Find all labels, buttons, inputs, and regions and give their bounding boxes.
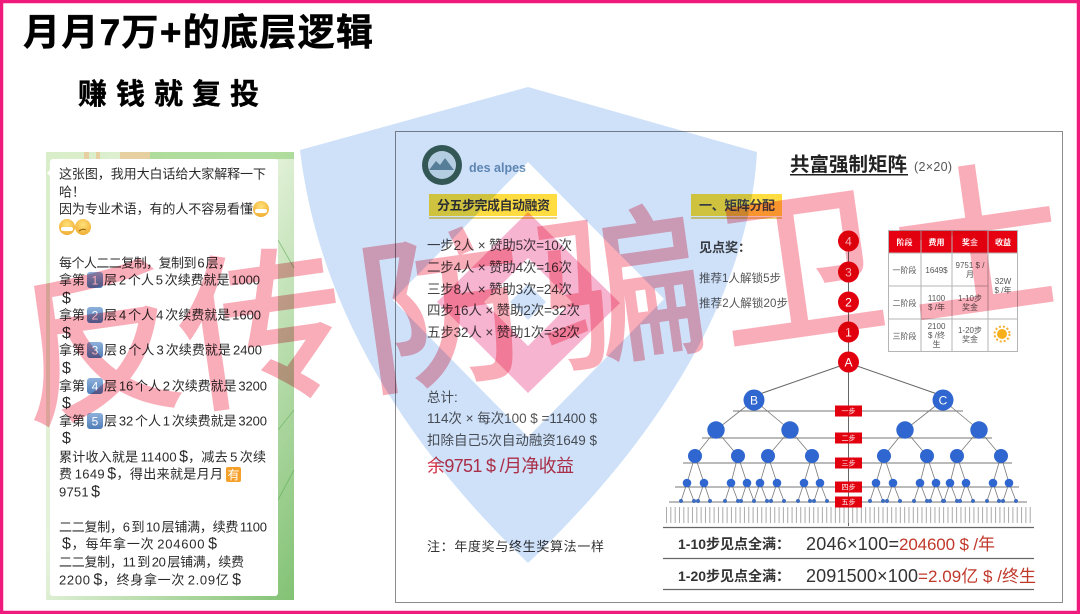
anti-fraud watermark text: 卫 (704, 165, 897, 375)
level 4 nodes (683, 479, 1013, 487)
table: stages: 月 (966, 270, 974, 279)
table: stages: 奖金 (962, 237, 978, 247)
chat text: $ (62, 325, 71, 342)
logo (422, 145, 526, 185)
text: 1-20 step total: =2.09亿 $ /终生 (918, 567, 1036, 586)
node B: B (750, 394, 758, 408)
table: stages: 1100 (928, 294, 946, 303)
text: steps list (427, 238, 580, 340)
text: totals: 114次 × 每次100 $ =11400 $ (427, 411, 597, 426)
node C: C (939, 394, 948, 408)
red step nodes: A (844, 356, 853, 370)
anti-fraud watermark text: 防 (347, 209, 540, 419)
anti-fraud watermark text (4, 143, 1075, 452)
chat text: 拿第 (59, 414, 85, 428)
text: 1-20 step total (678, 566, 1036, 586)
chat text: 每个人二二复制，复制到 6 层， (59, 256, 231, 270)
text: steps list: 一步2人 × 赞助5次=10次 (427, 238, 572, 253)
chat text: 9751 $ (59, 484, 100, 500)
step labels: 一步 (842, 408, 856, 416)
emoji: grin and thinking faces (59, 201, 269, 235)
chat text: 层 2 个人 5 次续费就是 1000 (104, 272, 260, 288)
number keycaps: 3 (92, 344, 99, 358)
number keycaps: 2 (92, 308, 99, 322)
chat text: $，每年拿一次 204600 $ (62, 536, 217, 552)
level 5 nodes (681, 499, 1016, 503)
level 3 nodes (688, 449, 1008, 463)
text: totals (427, 390, 597, 476)
anti-fraud watermark text: 士 (882, 143, 1075, 353)
chat background (46, 152, 294, 600)
heading: matrix: (2×20) (914, 160, 952, 174)
node C (932, 390, 954, 410)
chat text: $ (62, 430, 71, 447)
chat text: 因为专业术语，有的人不容易看懂 (59, 202, 253, 216)
chat text: 拿第 (59, 378, 85, 394)
table: stages: 1649$ (925, 266, 948, 275)
number keycaps: 5 (92, 414, 99, 428)
text: steps list: 二步4人 × 赞助4次=16次 (427, 260, 572, 275)
chat text: 层 32 个人 1 次续费就是 3200 (104, 414, 267, 428)
step labels: 二步 (842, 434, 856, 442)
text: referral bonus (699, 240, 788, 310)
text: 1-10 step total: 2046×100= (806, 534, 899, 554)
tree connectors (754, 241, 943, 526)
chat text: 二二复制，6 到 10 层铺满，续费 1100 (59, 520, 267, 534)
label: matrix allocation: 一、矩阵分配 (699, 198, 775, 213)
chat text: $ (62, 395, 71, 412)
label: five steps (429, 194, 557, 219)
table: stages: 奖金 (962, 334, 978, 344)
text: totals: 扣除自己5次自动融资1649 $ (427, 433, 597, 448)
table: stages: 9751 $ / (956, 261, 985, 270)
table: stages: 收益 (995, 237, 1011, 247)
anti-fraud watermark text: 骗 (526, 187, 719, 397)
subtitle: 赚钱就复投 (78, 78, 259, 111)
chat text: 层 8 个人 3 次续费就是 2400 (104, 342, 262, 358)
panel: matrix plan image (396, 132, 1062, 602)
text: referral bonus: 推荐1人解锁5步 (699, 271, 781, 285)
red step nodes: 4 (845, 234, 852, 248)
text: steps list: 五步32人 × 赞助1次=32次 (427, 325, 580, 340)
red step nodes (838, 230, 859, 372)
chat text: 拿第 (59, 272, 85, 288)
logo: des alpes (469, 161, 526, 175)
step labels: 三步 (842, 460, 856, 468)
table: stages: 32W (995, 277, 1012, 286)
chat text: 拿第 (59, 342, 85, 358)
title: 月月7万+的底层逻辑 (23, 12, 373, 53)
chat text: $ (62, 290, 71, 307)
table: stages: 2100 (928, 322, 946, 331)
number keycaps: 4 (92, 380, 99, 394)
panel: chat screenshot (46, 152, 294, 600)
table: stages: 一阶段 (892, 265, 916, 275)
table: stages: $ /终 (928, 330, 945, 340)
text: 1-20 step total: 1-20步见点全满： (678, 568, 790, 584)
icon: sun (994, 326, 1010, 342)
table: stages: 奖金 (962, 302, 978, 312)
red step nodes: 3 (845, 266, 852, 280)
shield watermark (300, 87, 757, 563)
chat text: 二二复制，11 到 20 层铺满，续费 (59, 554, 244, 570)
step labels (835, 406, 862, 508)
table: stages: 二阶段 (892, 298, 916, 308)
step labels: 五步 (842, 498, 856, 506)
text: 1-10 step total (678, 534, 995, 554)
chat text: 哈！ (59, 184, 85, 200)
text: steps list: 四步16人 × 赞助2次=32次 (427, 303, 580, 318)
chat text: $ (62, 360, 71, 377)
table: stages: 1-20步 (958, 326, 982, 335)
table: stages: 三阶段 (892, 331, 916, 341)
chat text: 2200 $，终身拿一次 2.09亿 $ (59, 572, 241, 588)
chat text (59, 166, 267, 588)
text: 1-10 step total: 204600 $ /年 (899, 535, 995, 554)
chat text: 层 4 个人 4 次续费就是 1600 (104, 308, 261, 322)
chat text: 费 1649 $，得出来就是月月 (59, 466, 223, 482)
text: referral bonus: 推荐2人解锁20步 (699, 296, 788, 310)
heading: matrix: 共富强制矩阵 (790, 153, 907, 176)
table: stages: 费用 (928, 237, 944, 247)
table: stages: 1-10步 (958, 294, 982, 303)
table: stages: 阶段 (896, 237, 912, 247)
text: referral bonus: 见点奖： (699, 240, 751, 255)
text: steps list: 三步8人 × 赞助3次=24次 (427, 282, 572, 297)
text: 1-10 step total: 1-10步见点全满： (678, 536, 790, 552)
chart: matrix tree (663, 230, 1034, 590)
level 2 nodes (707, 421, 988, 439)
emoji: orange you badge: 有 (227, 468, 240, 482)
panel border (396, 132, 1062, 602)
step labels: 四步 (842, 484, 856, 492)
text: totals: 余9751 $ /月净收益 (427, 456, 574, 476)
heading: matrix (790, 153, 952, 176)
chat text: 层 16 个人 2 次续费就是 3200 (104, 378, 267, 394)
label: matrix allocation (691, 194, 782, 219)
anti-fraud watermark text: 传 (166, 227, 359, 437)
table: stages: 生 (932, 339, 940, 349)
text: totals: 总计: (427, 390, 458, 405)
number keycaps (87, 272, 103, 429)
chat text: 这张图，我用大白话给大家解释一下 (59, 166, 266, 182)
node B (744, 390, 764, 410)
number keycaps: 1 (92, 274, 99, 288)
text: 1-20 step total: 2091500×100 (806, 566, 918, 586)
chat text: 拿第 (59, 308, 85, 322)
label: five steps: 分五步完成自动融资 (437, 198, 550, 213)
chat text: 累计收入就是 11400 $，减去 5 次续 (59, 448, 266, 466)
chat bubble (47, 159, 278, 596)
red step nodes: 2 (845, 296, 852, 310)
note: 注：年度奖与终生奖算法一样 (427, 539, 604, 554)
table: stages: $ /年 (928, 302, 945, 312)
table: stages (888, 230, 1018, 352)
anti-fraud watermark text: 反 (4, 242, 197, 452)
red step nodes: 1 (845, 326, 852, 340)
table: stages: $ /年 (995, 285, 1011, 295)
